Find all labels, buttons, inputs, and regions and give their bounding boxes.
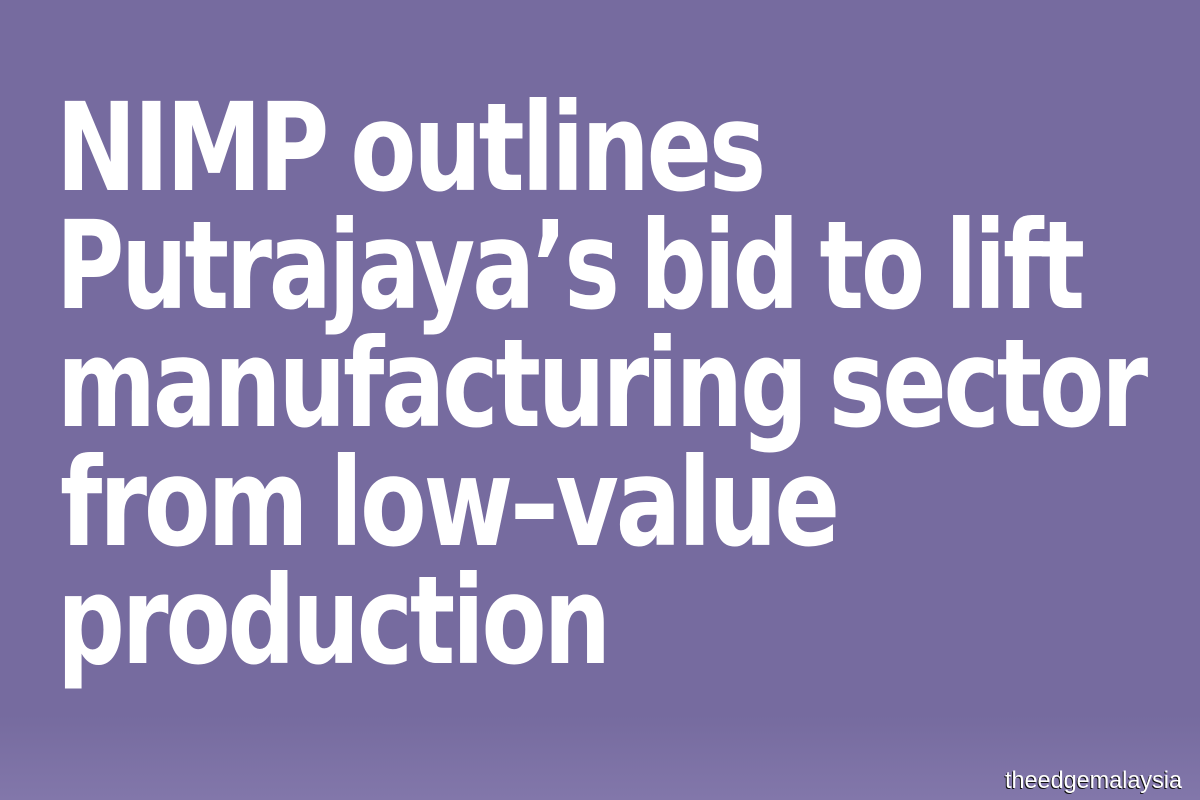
headline xyxy=(56,77,1148,692)
headline: from low–value xyxy=(60,432,837,574)
headline: production xyxy=(57,550,608,692)
watermark: theedgemalaysia: theedgemalaysia xyxy=(1005,767,1183,794)
watermark: theedgemalaysia: theedgemalaysia xyxy=(1004,768,1182,795)
headline: NIMP outlines xyxy=(56,77,763,219)
